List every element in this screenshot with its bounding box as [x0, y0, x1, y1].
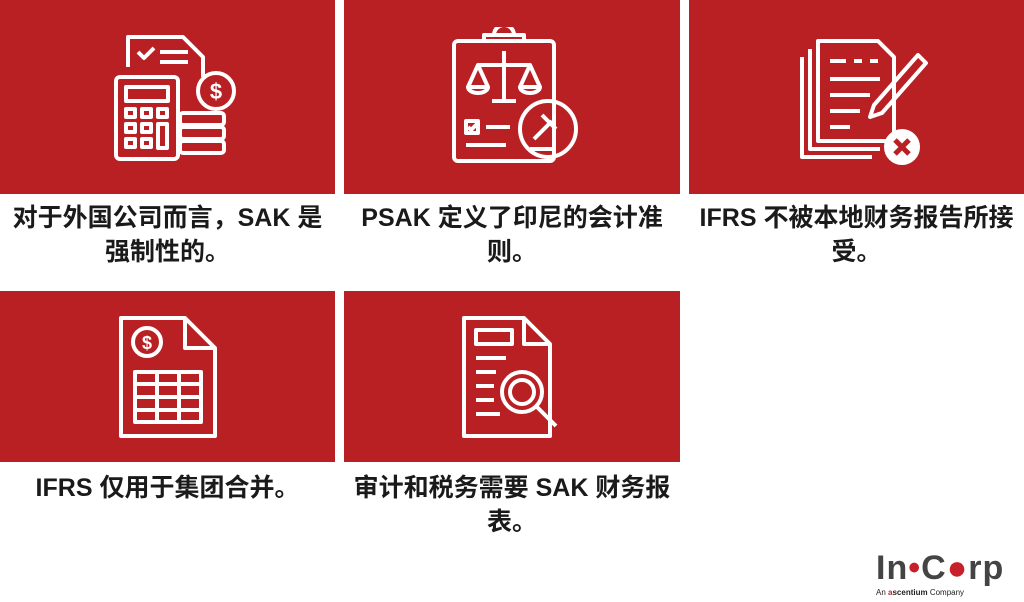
text: PSAK defines: 则。 — [487, 238, 537, 266]
panel: clipboard scales — [344, 0, 680, 194]
text: PSAK defines — [361, 204, 663, 266]
text: PSAK defines: PSAK 定义了印尼的会计准 — [361, 204, 663, 232]
logo: InCorp: An ascentium Company — [876, 588, 964, 597]
icon: dollar spreadsheet: $ — [141, 332, 152, 352]
icon: dollar spreadsheet — [119, 316, 217, 438]
text: audit needs SAK: 表。 — [487, 508, 537, 536]
panel: calculator — [0, 0, 335, 194]
icon: clipboard with scales and gavel — [452, 27, 578, 163]
panel: documents pen — [689, 0, 1024, 194]
panel: spreadsheet — [0, 291, 335, 462]
text: SAK mandatory — [13, 204, 322, 266]
text: SAK mandatory: 强制性的。 — [105, 238, 230, 266]
text: IFRS not accepted: IFRS 不被本地财务报告所接 — [700, 204, 1013, 232]
text: SAK mandatory: 对于外国公司而言，SAK 是 — [13, 204, 322, 232]
text: audit needs SAK — [354, 474, 670, 536]
text: audit needs SAK: 审计和税务需要 SAK 财务报 — [354, 474, 670, 502]
text: IFRS consolidation: IFRS 仅用于集团合并。 — [36, 474, 299, 502]
panel: document search — [344, 291, 680, 462]
text: IFRS not accepted: 受。 — [831, 238, 882, 266]
icon: documents with pen and x — [800, 39, 928, 165]
icon: document magnifier — [462, 316, 558, 438]
text: IFRS not accepted — [700, 204, 1013, 266]
logo: InCorp: In•C●rp — [876, 549, 1004, 587]
icon: calculator and coins: $ — [209, 79, 222, 104]
icon: calculator and coins — [114, 35, 236, 161]
